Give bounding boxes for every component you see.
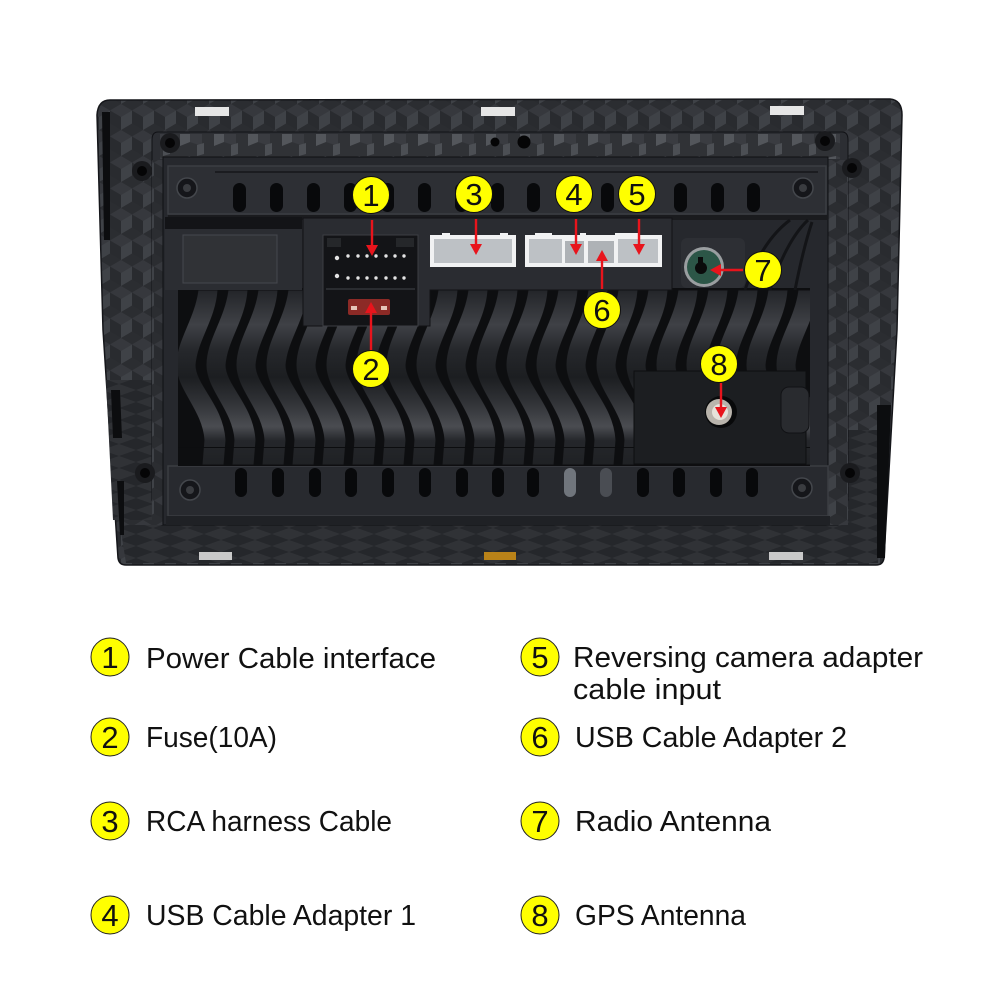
callout marker 7 [744,252,782,288]
legend item 6: USB Cable Adapter 2 [575,722,847,754]
upper right curved ribs [745,220,812,290]
screw holes on panel [132,131,862,483]
callout marker 4 [556,176,592,212]
legend item 3 [91,802,392,840]
bottom row vent slots [235,468,758,497]
legend item 5 [521,638,923,706]
rear chassis body [163,157,830,525]
arrow: 1 [366,220,378,256]
white connector: USB and camera group [525,233,662,267]
raised inner panel [152,132,848,525]
arrow: 4 [570,219,582,255]
mounting tab: bottom left [199,552,232,560]
legend item 5: Reversing camera adapter [573,642,923,674]
callout marker 1 [352,176,390,214]
mounting tab: top left [195,107,229,116]
legend item 7: 7 [531,804,549,839]
legend item 8: GPS Antenna [575,900,747,932]
fuse [348,299,390,315]
left blank block [165,217,302,290]
legend item 5: 5 [531,640,549,675]
callout marker 6: 6 [593,293,611,328]
legend item 8 [521,896,747,934]
callout marker 2 [352,350,390,388]
callout marker 8: 8 [710,347,728,382]
mounting tab: top right [770,106,804,115]
legend item 1: Power Cable interface [146,643,436,675]
radio antenna socket [681,238,745,288]
top row vent slots [233,183,760,212]
legend item 6: 6 [531,720,549,755]
side bump [781,387,809,433]
side slots [102,112,891,558]
callout marker 1: 1 [362,178,380,213]
arrow: 8 [715,383,727,418]
mounting tab: bottom right [769,552,803,560]
GPS antenna socket [705,396,737,428]
legend item 5: cable input [573,674,721,706]
callout marker 8 [700,346,738,382]
callout marker 6 [584,292,620,328]
callout marker 3 [456,176,492,212]
legend item 4 [91,896,416,934]
GPS recess panel [634,371,806,464]
legend item 6 [521,718,847,756]
power connector [323,235,418,326]
legend item 2: Fuse(10A) [146,722,277,754]
legend item 2 [91,718,277,756]
callout marker 2: 2 [362,352,380,387]
arrow: 2 [365,302,377,350]
arrow: 6 [596,250,608,289]
legend item 2: 2 [101,720,119,755]
device frame [97,99,902,565]
legend item 7: Radio Antenna [575,806,772,838]
curved heat-sink vanes [176,288,826,466]
legend item 8: 8 [531,898,549,933]
callout marker 5: 5 [628,177,646,212]
callout marker 7: 7 [754,253,772,288]
arrow: 5 [633,219,645,255]
legend item 3: RCA harness Cable [146,806,392,838]
legend item 4: USB Cable Adapter 1 [146,900,416,932]
arrow: 3 [470,219,482,255]
legend item 4: 4 [101,898,119,933]
mounting tab: bottom centre [484,552,516,560]
legend item 7 [521,802,772,840]
connector panel background [303,218,672,326]
white connector: RCA [430,233,516,267]
legend item 3: 3 [101,804,119,839]
callout marker 5 [618,176,656,212]
callout marker 4: 4 [565,177,583,212]
body screws [177,178,813,500]
callout marker 3: 3 [465,177,483,212]
legend item 1: 1 [101,640,119,675]
mounting tab: top centre [481,107,515,116]
legend item 1 [91,638,436,676]
arrow: 7 [710,264,743,276]
